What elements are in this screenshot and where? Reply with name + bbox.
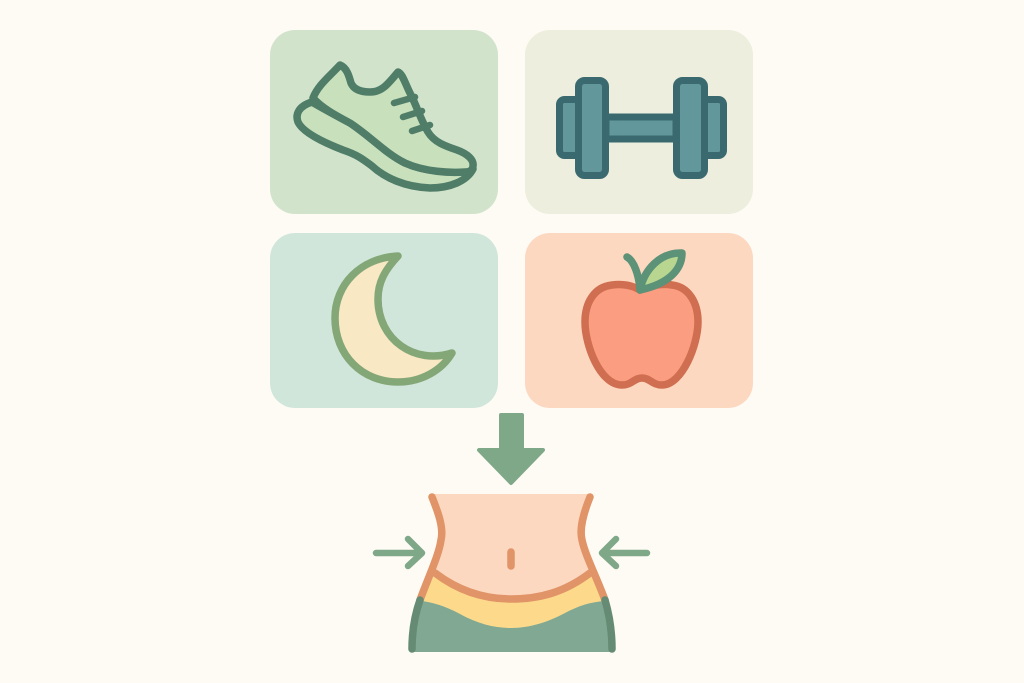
panel: crescent moon <box>270 233 498 408</box>
arrow: left side inward <box>376 539 422 566</box>
arrow: down to waist <box>479 415 543 483</box>
panel: apple <box>525 233 753 408</box>
body outline right <box>581 497 605 600</box>
navel <box>507 552 515 566</box>
shorts edge left <box>412 600 420 649</box>
panel: running shoe <box>270 30 498 214</box>
panel: dumbbell <box>525 30 753 214</box>
shorts edge right <box>605 600 612 649</box>
arrow: right side inward <box>602 539 647 566</box>
icon: running shoe <box>297 65 473 188</box>
green shorts <box>410 601 613 652</box>
yellow band <box>418 573 606 640</box>
icon: dumbbell <box>560 80 724 176</box>
waistband line <box>435 573 590 599</box>
icon: crescent moon <box>335 256 452 382</box>
body outline left <box>420 497 442 600</box>
waist figure <box>410 494 613 652</box>
torso skin <box>422 494 600 605</box>
icon: apple <box>585 253 698 385</box>
